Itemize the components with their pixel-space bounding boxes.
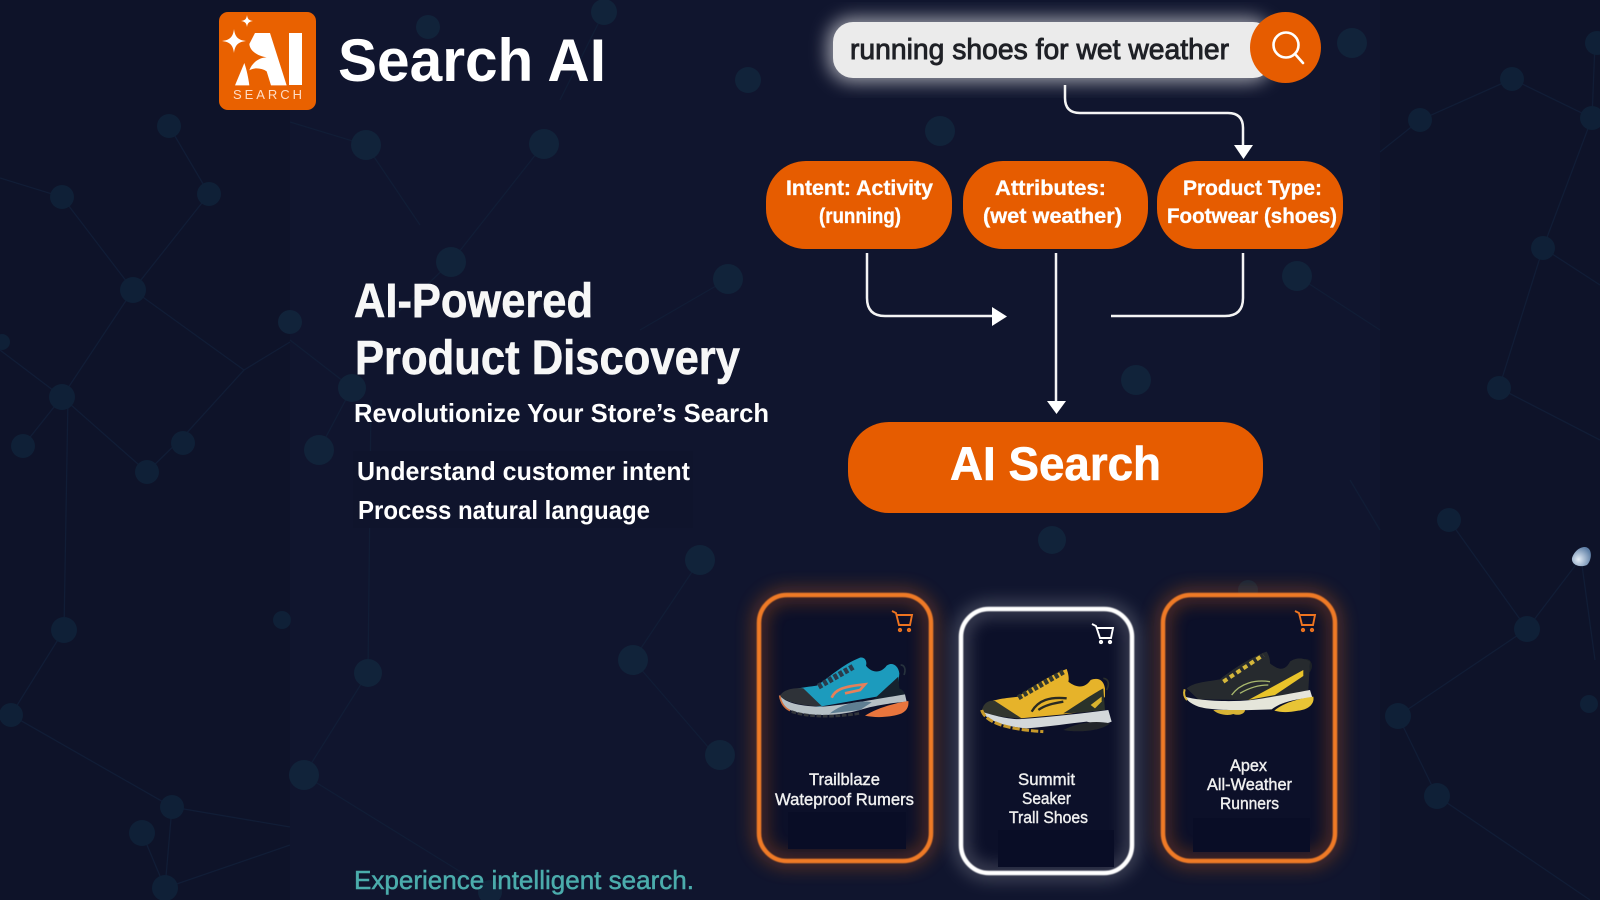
pill: product type: Product Type: <box>1183 177 1322 200</box>
arrow: intent to center <box>867 253 1007 326</box>
pill: intent <box>766 161 952 249</box>
product name: Runners <box>1220 794 1279 813</box>
product card 2 <box>961 609 1132 873</box>
product name <box>1009 770 1088 827</box>
connector: product type to center <box>1111 253 1243 316</box>
subheading: Revolutionize Your Store’s Search <box>354 398 769 428</box>
pill: attributes: Attributes: <box>995 177 1106 200</box>
pill: product type: Footwear (shoes) <box>1167 205 1337 228</box>
product name: Wateproof Rumers <box>775 790 914 809</box>
pill: intent: (running) <box>819 205 901 228</box>
icon: cart <box>1295 611 1315 631</box>
search button <box>1250 12 1321 83</box>
product name: Trailblaze <box>809 770 880 789</box>
icon: large sparkle <box>222 29 246 53</box>
product name: Trall Shoes <box>1009 808 1088 827</box>
query text: running shoes for wet weather <box>850 34 1229 66</box>
feature list <box>353 451 693 528</box>
logo letter I <box>289 33 302 85</box>
arrow: query to product type <box>1065 85 1253 159</box>
AI search button: AI Search <box>950 437 1161 490</box>
pill: intent: Intent: Activity <box>786 177 933 200</box>
icon: magnifier <box>1274 32 1303 63</box>
feature list: Understand customer intent <box>357 456 690 486</box>
logo <box>219 12 316 110</box>
product name: All-Weather <box>1207 775 1292 794</box>
product card 1 <box>759 595 931 861</box>
left heading <box>354 275 740 385</box>
product name: Apex <box>1230 756 1267 775</box>
shoe: yellow <box>982 669 1112 732</box>
AI search button <box>848 422 1263 513</box>
left heading: AI-Powered <box>354 275 593 328</box>
icon: cart <box>892 611 912 631</box>
shoe: blue <box>779 658 908 717</box>
product name <box>1207 756 1292 813</box>
left heading: Product Discovery <box>355 332 740 385</box>
icon: cart <box>1092 624 1113 643</box>
product name: Seaker <box>1022 789 1071 808</box>
product name: Summit <box>1018 770 1075 789</box>
product name <box>775 770 914 809</box>
pill: attributes: (wet weather) <box>983 205 1122 228</box>
bright node <box>1572 547 1591 566</box>
shoe: black <box>1184 652 1314 715</box>
tagline: Experience intelligent search. <box>354 865 694 895</box>
feature list: Process natural language <box>358 495 650 525</box>
product card 3 <box>1163 595 1335 861</box>
arrow: attributes to AI search <box>1047 253 1066 414</box>
pill: product type <box>1157 161 1343 249</box>
icon: small sparkle <box>241 15 253 27</box>
logo letter A <box>235 33 287 85</box>
search bar <box>828 12 1321 83</box>
logo wordmark: SEARCH <box>233 87 302 102</box>
title: Search AI <box>338 27 606 94</box>
pill: attributes <box>963 161 1148 249</box>
